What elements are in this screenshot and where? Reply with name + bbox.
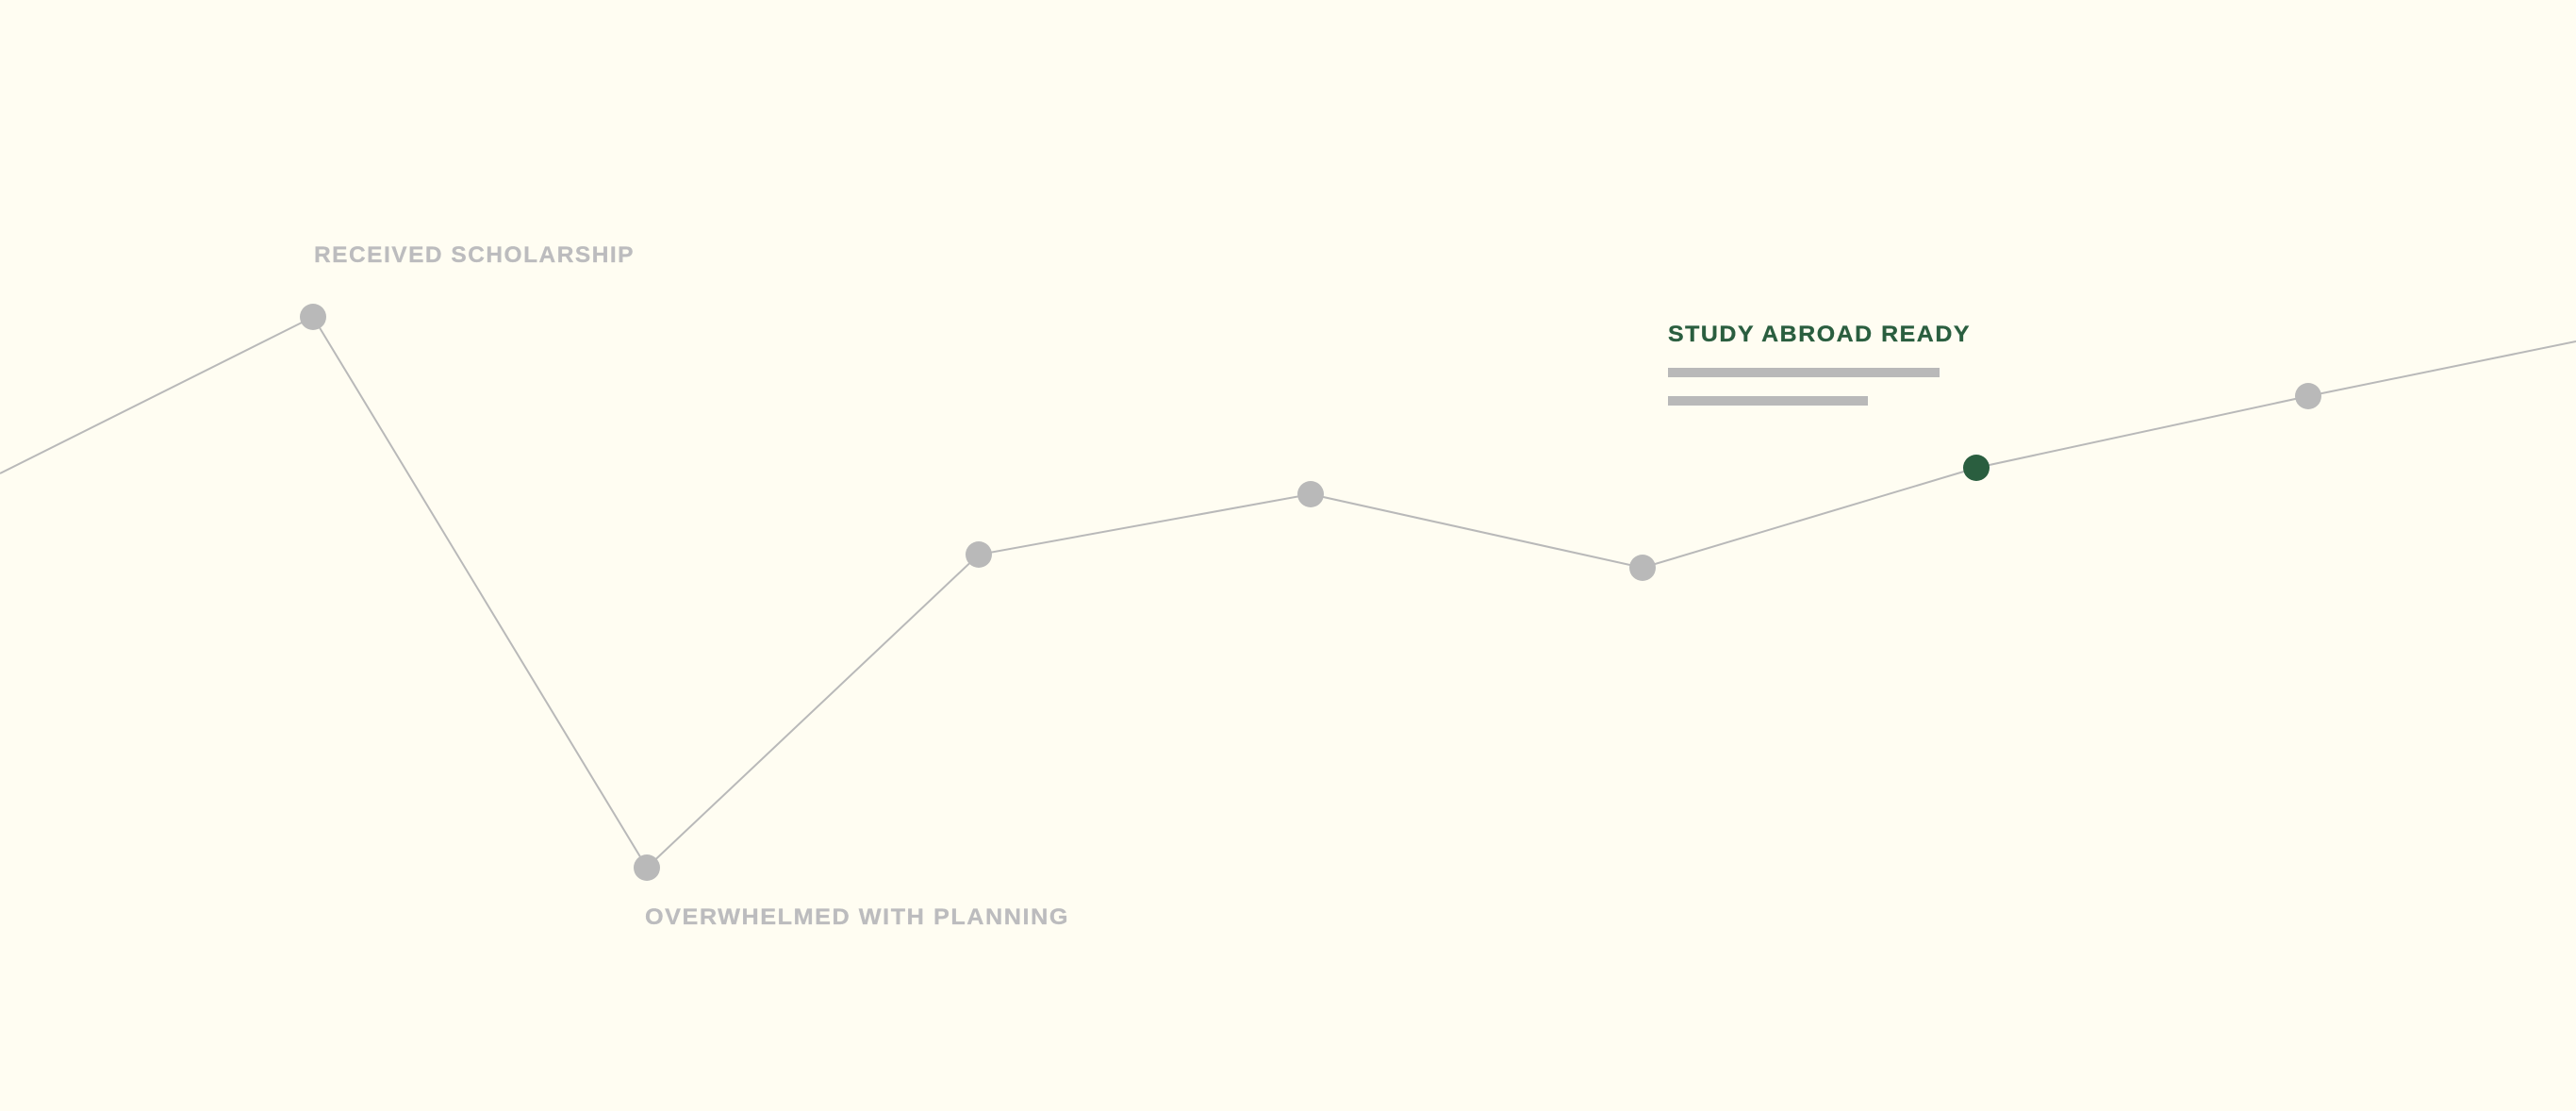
journey line <box>0 317 2576 868</box>
timeline point 7 <box>2295 383 2321 409</box>
timeline point 4 <box>1297 481 1324 507</box>
timeline point 5 <box>1629 555 1656 581</box>
timeline point: overwhelmed with planning <box>634 854 660 881</box>
label: overwhelmed with planning: OVERWHELMED WITH PLANNING <box>645 904 1069 930</box>
highlighted point: study abroad ready <box>1963 455 1990 481</box>
timeline point: received scholarship <box>300 304 326 330</box>
timeline point 3 <box>966 541 992 568</box>
label: received scholarship: RECEIVED SCHOLARSHIP <box>314 242 635 268</box>
callout: study abroad ready <box>1668 322 1971 406</box>
callout heading: STUDY ABROAD READY <box>1668 322 1971 347</box>
placeholder text bar 1 <box>1668 368 1940 377</box>
placeholder text bar 2 <box>1668 396 1868 406</box>
